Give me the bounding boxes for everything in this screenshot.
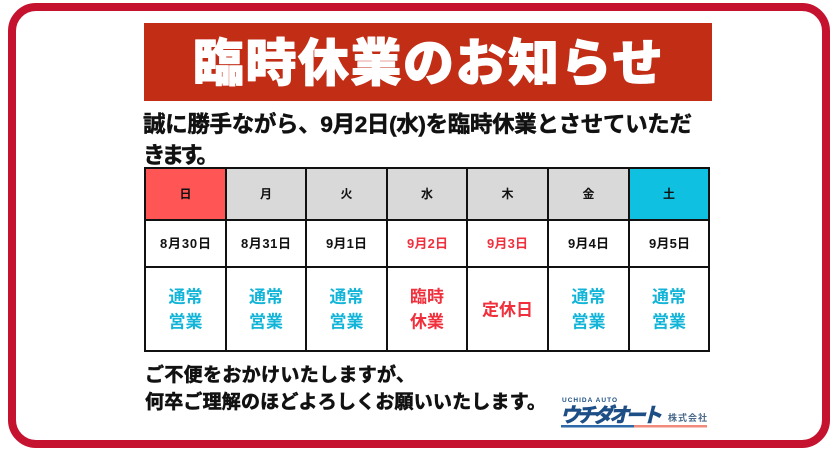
- status labels: 通常: [168, 288, 202, 306]
- status labels: 休業: [410, 312, 444, 332]
- title banner: 臨時休業のお知らせ: [193, 35, 663, 92]
- table grid: [145, 168, 709, 351]
- weekday labels: 土: [663, 186, 675, 201]
- weekday labels: 月: [260, 187, 272, 201]
- weekday labels: 火: [340, 187, 353, 201]
- closing text: 何卒ご理解のほどよろしくお願いいたします。: [145, 390, 546, 413]
- schedule table: [145, 168, 709, 351]
- status labels: 通常: [572, 288, 606, 306]
- date labels: 9月5日: [649, 236, 690, 251]
- weekday labels: 金: [582, 186, 595, 201]
- date labels: 8月31日: [241, 236, 291, 251]
- weekday labels: 日: [179, 187, 192, 201]
- status labels: 通常: [652, 288, 686, 306]
- closing text: ご不便をおかけいたしますが、: [145, 363, 415, 386]
- weekday labels: [179, 186, 675, 201]
- status labels: 臨時: [410, 288, 444, 306]
- logo: Uchida Auto: ウチダオート: [560, 404, 662, 427]
- weekday header cell fills: [145, 168, 709, 220]
- status labels: 営業: [249, 312, 283, 332]
- status labels: 営業: [652, 312, 686, 332]
- status labels: 営業: [572, 312, 606, 332]
- date labels: [160, 236, 690, 251]
- status labels: 営業: [168, 312, 202, 332]
- status labels: 通常: [249, 288, 283, 306]
- date labels: 9月4日: [568, 236, 609, 251]
- intro text: 誠に勝手ながら、9月2日(水)を臨時休業とさせていただ: [143, 111, 692, 137]
- date labels: 8月30日: [160, 236, 211, 251]
- logo: Uchida Auto: UCHIDA AUTO: [562, 397, 617, 404]
- title banner: [144, 23, 712, 101]
- logo: Uchida Auto: 株式会社: [668, 412, 707, 423]
- date labels: 9月1日: [326, 236, 367, 251]
- closing text: [145, 363, 546, 413]
- date labels: 9月2日: [407, 236, 448, 251]
- intro text: きます。: [143, 143, 219, 168]
- intro text: [143, 111, 692, 168]
- weekday labels: 木: [501, 186, 514, 201]
- status labels: 営業: [330, 312, 364, 332]
- status labels: [168, 288, 686, 332]
- status labels: 通常: [330, 288, 364, 306]
- date labels: 9月3日: [487, 236, 528, 251]
- status labels: 定休日: [482, 300, 533, 320]
- weekday labels: 水: [421, 186, 433, 201]
- logo: Uchida Auto: [560, 397, 707, 428]
